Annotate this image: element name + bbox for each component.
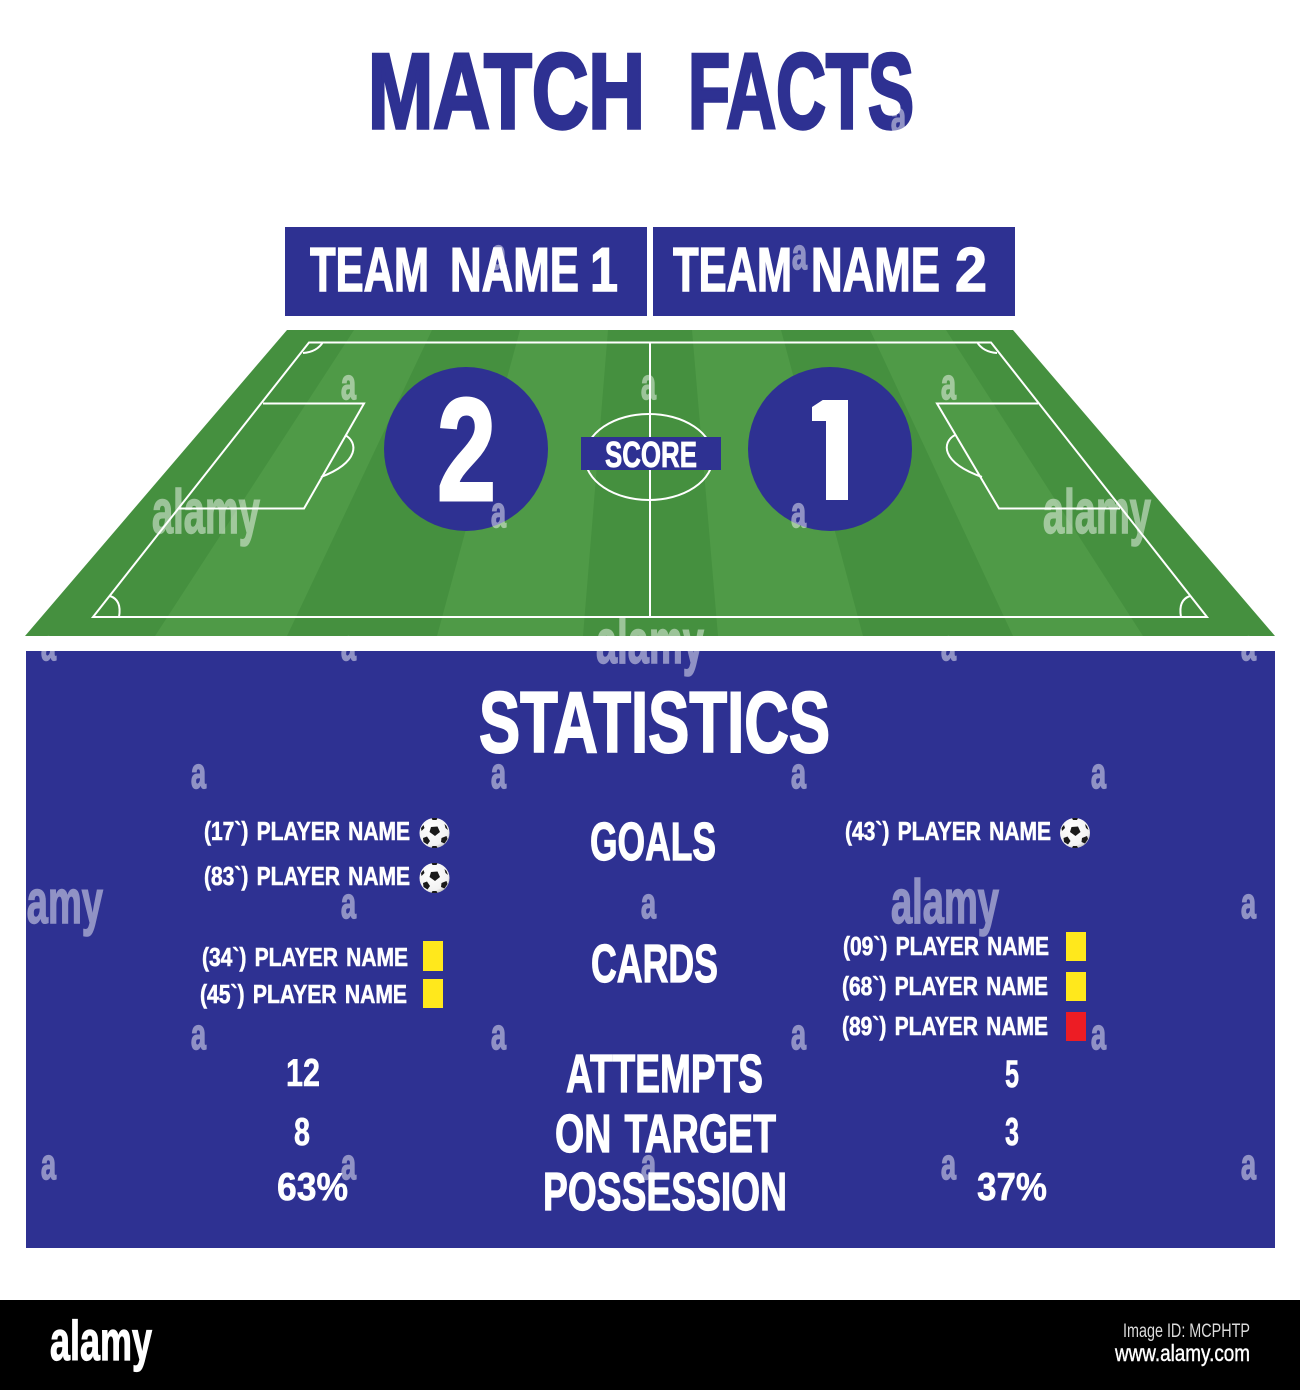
stock watermarks: a <box>941 360 956 409</box>
row label: attempts: ATTEMPTS <box>566 1044 763 1104</box>
stock watermarks: a <box>641 1140 656 1189</box>
title: MATCH <box>368 31 645 151</box>
home score circle: 2 <box>437 368 496 531</box>
team 2 goals: (43`) PLAYER NAME <box>845 816 1051 846</box>
team 1 goals <box>204 816 450 893</box>
statistics heading: STATISTICS <box>479 675 830 771</box>
stock watermarks: a <box>1091 749 1106 798</box>
team name 1 banner: TEAM <box>310 236 429 305</box>
team 1 numbers <box>277 1052 348 1209</box>
team name 1 banner: NAME <box>450 236 579 305</box>
team 2 cards <box>842 931 1086 1041</box>
team name 2 banner: TEAM <box>673 236 792 305</box>
stock watermarks: alamy <box>1043 478 1151 547</box>
stock watermarks: a <box>791 1010 806 1059</box>
team 1 numbers: 8 <box>294 1111 310 1154</box>
stock watermarks: a <box>791 488 806 537</box>
stock watermarks: a <box>191 1010 206 1059</box>
stock watermarks: a <box>941 621 956 670</box>
stock watermarks: a <box>941 1140 956 1189</box>
footer logo: alamy <box>50 1309 152 1372</box>
title <box>368 31 914 151</box>
team 2 numbers <box>977 1053 1047 1209</box>
team 1 numbers: 63% <box>277 1166 348 1209</box>
stock watermarks: a <box>491 230 506 279</box>
team 1 cards: (34`) PLAYER NAME <box>202 942 408 972</box>
stock watermarks: alamy <box>891 868 999 937</box>
away score circle: 1 <box>793 369 874 531</box>
stock watermarks: alamy <box>0 868 103 937</box>
stock watermarks: a <box>491 488 506 537</box>
statistics panel <box>26 651 1275 1248</box>
team 1 goals: (17`) PLAYER NAME <box>204 816 410 846</box>
row label: goals: GOALS <box>590 812 716 872</box>
team 2 cards: (68`) PLAYER NAME <box>842 971 1048 1001</box>
website: www.alamy.com <box>1114 1340 1250 1366</box>
stock watermarks: a <box>491 749 506 798</box>
stock watermarks: a <box>491 1010 506 1059</box>
stock watermarks: a <box>341 360 356 409</box>
team 1 cards: (45`) PLAYER NAME <box>200 979 407 1009</box>
stock watermarks: a <box>641 879 656 928</box>
stock watermarks: a <box>41 621 56 670</box>
home score circle <box>384 367 548 531</box>
team 2 numbers: 3 <box>1005 1111 1019 1154</box>
team 2 numbers: 5 <box>1005 1053 1019 1096</box>
stock watermarks: a <box>341 1140 356 1189</box>
football pitch <box>25 330 1275 636</box>
team name 2 banner: NAME <box>811 236 940 305</box>
team 2 cards: (09`) PLAYER NAME <box>843 931 1049 961</box>
stock watermarks: a <box>641 93 656 142</box>
team 1 goals: (83`) PLAYER NAME <box>204 861 410 891</box>
team name 2 banner: 2 <box>955 236 987 305</box>
stock watermarks: a <box>1241 621 1256 670</box>
stock watermarks: a <box>641 360 656 409</box>
stock watermarks: a <box>791 749 806 798</box>
stock watermarks: a <box>191 749 206 798</box>
team name 1 banner <box>285 227 647 316</box>
stock watermarks: a <box>792 230 807 279</box>
team name 2 banner <box>653 227 1015 316</box>
score label: SCORE <box>605 434 697 475</box>
stock watermarks: a <box>41 1140 56 1189</box>
stock watermarks <box>0 93 1256 1189</box>
footer bar <box>0 1300 1300 1390</box>
team name 1 banner: 1 <box>590 236 618 305</box>
team 2 cards: (89`) PLAYER NAME <box>842 1011 1048 1041</box>
team 1 cards <box>200 941 443 1009</box>
stock watermarks: alamy <box>596 608 704 677</box>
team 1 numbers: 12 <box>286 1052 320 1095</box>
team 2 numbers: 37% <box>977 1166 1047 1209</box>
image id: Image ID: MCPHTP <box>1123 1321 1250 1342</box>
away score circle <box>748 367 912 531</box>
stock watermarks: a <box>341 621 356 670</box>
stock watermarks: a <box>891 93 906 142</box>
stock watermarks: a <box>1241 879 1256 928</box>
row label: cards: CARDS <box>591 934 718 994</box>
row label: on target: ON TARGET <box>555 1104 776 1164</box>
row label: possession: POSSESSION <box>543 1162 787 1222</box>
stock watermarks: a <box>1091 1010 1106 1059</box>
stock watermarks: a <box>341 879 356 928</box>
stock watermarks: alamy <box>152 478 260 547</box>
title: FACTS <box>688 31 914 151</box>
stock watermarks: a <box>1241 1140 1256 1189</box>
